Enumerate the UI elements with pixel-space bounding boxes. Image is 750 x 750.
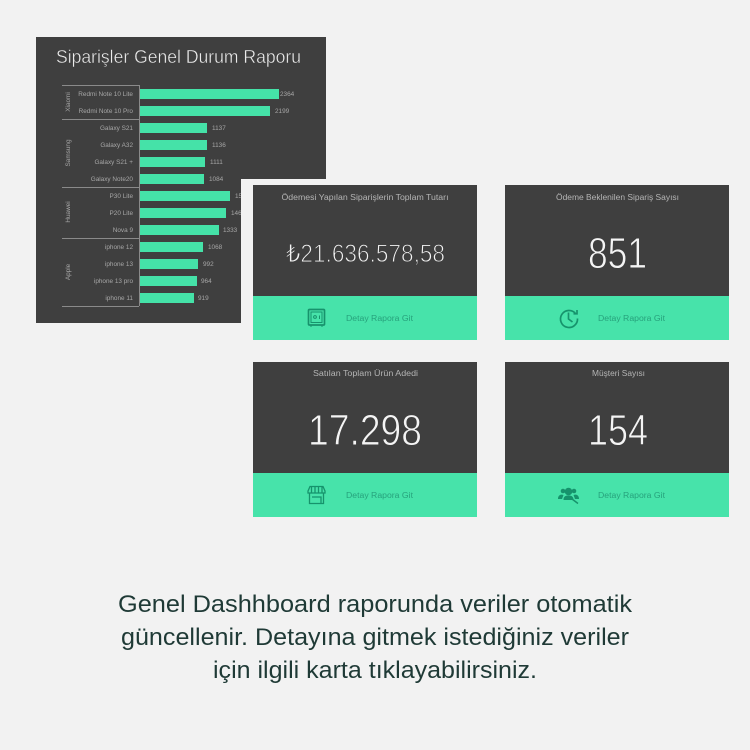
bar chart: orders by model: 1111: [210, 159, 223, 166]
bar chart: orders by model: 1068: [208, 244, 223, 251]
bar chart: orders by model: iphone 13 pro: [94, 278, 133, 285]
card: customer count: [505, 362, 729, 517]
card: total paid orders amount: Ödemesi Yapılan Siparişlerin Toplam Tutarı: [282, 193, 448, 202]
card: customer count: Müşteri Sayısı: [592, 369, 645, 378]
card: pending payment orders: Ödeme Beklenilen Sipariş Sayısı: [556, 193, 679, 202]
card: total paid orders amount: ₺21.636.578,58: [286, 240, 445, 268]
bar chart: orders by model: P30 Lite: [110, 193, 133, 200]
bar chart: orders by model: 1560: [235, 193, 250, 200]
bar chart: orders by model: Galaxy A32: [100, 142, 133, 149]
bar chart: orders by model: 1137: [212, 125, 226, 132]
text block: footer explanation: [118, 591, 633, 684]
bar chart: orders by model: 1333: [223, 227, 238, 234]
bar chart: orders by model: iphone 13: [105, 261, 133, 268]
card: total paid orders amount: Detay Rapora Git: [346, 314, 414, 323]
bar chart: orders by model: Apple: [65, 263, 72, 280]
bar chart: orders by model: iphone 11: [105, 295, 133, 302]
card: pending payment orders: Detay Rapora Git: [598, 314, 666, 323]
card: customer count: 154: [588, 406, 648, 455]
bar chart: orders by model: 919: [198, 295, 209, 302]
text block: footer explanation: güncellenir. Detayına gitmek istediğiniz veriler: [121, 624, 629, 651]
text block: footer explanation: için ilgili karta tıklayabilirsiniz.: [213, 657, 537, 684]
bar chart: orders by model: 2199: [275, 108, 290, 115]
bar chart: orders by model: Galaxy Note20: [91, 176, 133, 183]
card: total products sold: Detay Rapora Git: [346, 491, 414, 500]
card: total products sold: [253, 362, 477, 517]
card: pending payment orders: 851: [588, 229, 647, 278]
bar chart: orders by model: 2364: [280, 91, 295, 98]
bar chart: orders by model: Huawei: [65, 201, 72, 223]
heading: report title: Siparişler Genel Durum Raporu: [56, 47, 301, 67]
bar chart: orders by model: Galaxy S21: [100, 125, 133, 132]
bar chart: orders by model: [62, 86, 295, 306]
bar chart: orders by model: 992: [203, 261, 214, 268]
bar chart: orders by model: iphone 12: [105, 244, 133, 251]
bar chart: orders by model: P20 Lite: [110, 210, 133, 217]
bar chart: orders by model: Redmi Note 10 Lite: [78, 91, 133, 98]
bar chart: orders by model: 964: [201, 278, 212, 285]
card: customer count: Detay Rapora Git: [598, 491, 666, 500]
icon: safe: [308, 310, 324, 327]
bar chart: orders by model: Nova 9: [113, 227, 133, 234]
bar chart: orders by model: Samsung: [65, 139, 72, 166]
icon: clock: [561, 310, 578, 327]
text block: footer explanation: Genel Dashhboard raporunda veriler otomatik: [118, 591, 633, 618]
card: total paid orders amount: [253, 185, 477, 340]
bar chart: orders by model: Galaxy S21 +: [94, 159, 133, 166]
panel: order status report chart: [36, 37, 326, 323]
card: total products sold: Satılan Toplam Ürün Adedi: [313, 369, 418, 378]
bar chart: orders by model: 1136: [212, 142, 226, 149]
bar chart: orders by model: Xiaomi: [65, 92, 72, 112]
card: pending payment orders: [505, 185, 729, 340]
icon: customers: [558, 488, 579, 504]
bar chart: orders by model: Redmi Note 10 Pro: [79, 108, 133, 115]
bar chart: orders by model: 1084: [209, 176, 224, 183]
bar chart: orders by model: 1468: [231, 210, 246, 217]
icon: storefront: [308, 486, 325, 504]
card: total products sold: 17.298: [308, 406, 422, 455]
